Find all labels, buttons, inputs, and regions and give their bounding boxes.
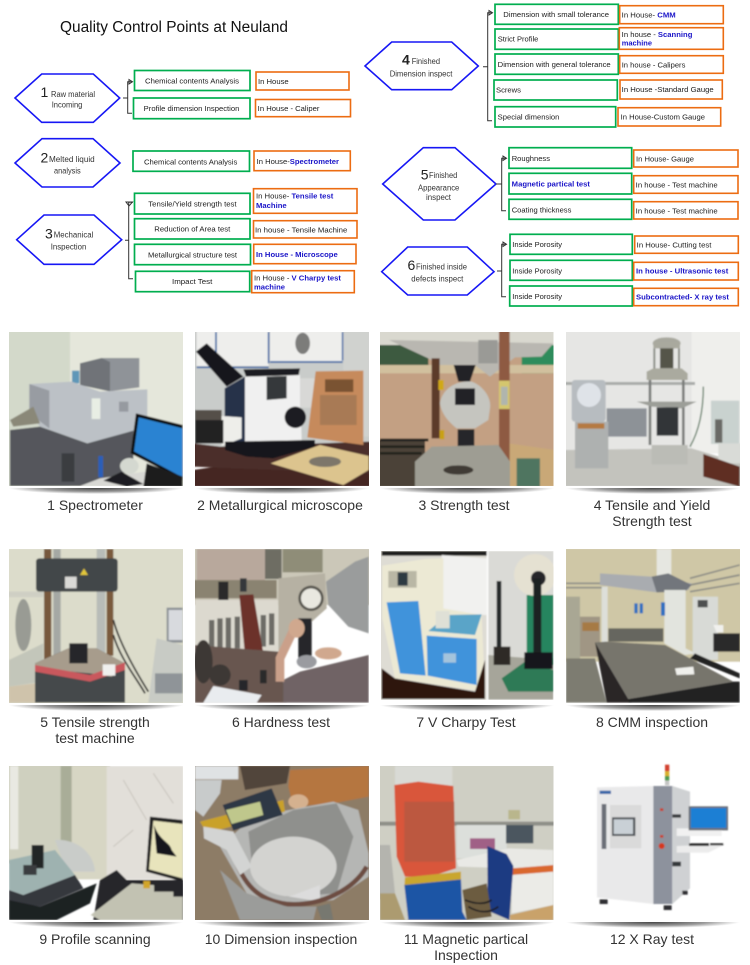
row: magnetic partical test	[509, 173, 632, 194]
row: dimension with general tolerance: Dimension with general tolerance	[498, 60, 611, 69]
row: custom gauge	[618, 108, 721, 126]
row: scanning machine	[619, 28, 723, 49]
row: profile dimension inspection: Profile dimension Inspection	[144, 104, 239, 113]
panel: 5 finished appearance inspect	[383, 148, 738, 220]
row: inside porosity: Inside Porosity	[512, 266, 562, 275]
shadow	[383, 705, 551, 711]
row: test machine	[634, 202, 738, 219]
caption: 10 Dimension inspection	[205, 931, 357, 947]
photo 3: strength test	[378, 330, 555, 487]
row: test machine: In house - Test machine	[636, 206, 718, 215]
row: chemical contents analysis: Chemical contents Analysis	[144, 158, 238, 166]
row: chemical contents analysis	[133, 151, 250, 171]
row: ultrasonic test: In house - Ultrasonic test	[636, 267, 729, 276]
row: microscope	[254, 244, 356, 264]
bracket arrow	[123, 80, 132, 113]
hexagon: mechanical	[17, 215, 122, 264]
row: cutting test: In House- Cutting test	[637, 241, 712, 250]
hexagon: mechanical: Mechanical	[54, 230, 94, 240]
photo 11: magnetic partical inspection	[378, 763, 555, 922]
row: tensile test machine: Machine	[256, 201, 287, 210]
panel: 4 finished dimension inspect	[365, 4, 723, 127]
caption	[594, 497, 710, 529]
row: custom gauge: In House-Custom Gauge	[621, 113, 705, 122]
row: calipers: In house - Calipers	[622, 61, 686, 70]
row: dimension with general tolerance	[495, 54, 618, 74]
panel: 3 mechanical inspection	[17, 189, 357, 293]
caption: Strength test	[612, 513, 692, 529]
row: standard gauge	[620, 80, 722, 99]
hexagon: raw material: 1	[40, 84, 48, 100]
row: x ray test	[634, 288, 738, 306]
row: spectrometer	[254, 151, 350, 171]
row: cutting test	[635, 236, 738, 253]
row: inside porosity: Inside Porosity	[512, 240, 562, 249]
hexagon: finished inside defects: defects inspect	[411, 274, 464, 283]
caption: 2 Metallurgical microscope	[197, 497, 363, 513]
row: strict profile	[495, 29, 618, 49]
row: tensile test machine	[254, 189, 357, 213]
shadow	[569, 488, 737, 494]
caption: 5 Tensile strength	[40, 714, 150, 730]
row: standard gauge: In House -Standard Gauge	[622, 85, 714, 94]
row: x ray test: Subcontracted- X ray test	[636, 293, 729, 302]
photo 8: cmm inspection	[565, 548, 742, 703]
photo 1: spectrometer	[7, 330, 185, 487]
caption: 4 Tensile and Yield	[594, 497, 710, 513]
row: tensile test machine: In House- Tensile test	[256, 192, 334, 201]
hexagon: finished inside defects	[382, 247, 494, 295]
hexagon: finished appearance: Appearance	[418, 183, 460, 192]
panel: 6 finished inside defects inspect	[382, 234, 738, 306]
photo 5: tensile strength test machine	[7, 548, 185, 705]
hexagon: finished dimension	[365, 42, 478, 90]
shadow	[12, 922, 180, 928]
bracket arrow	[497, 242, 506, 297]
row: calipers	[620, 56, 723, 73]
hexagon: melted liquid	[15, 139, 120, 187]
hexagon: melted liquid: 2	[40, 150, 48, 166]
row: special dimension	[495, 107, 616, 127]
row: v charpy test machine	[252, 271, 354, 293]
row: inside porosity: Inside Porosity	[512, 292, 562, 301]
caption: 12 X Ray test	[610, 931, 694, 947]
row: metallurgical structure test	[134, 244, 250, 265]
photo 9: profile scanning	[7, 763, 183, 920]
caption: 6 Hardness test	[232, 714, 330, 730]
photo 10: dimension inspection	[193, 763, 370, 923]
row: in house: In House	[258, 77, 289, 86]
shadow	[12, 705, 180, 711]
row: cmm: In House- CMM	[622, 11, 676, 20]
shadow	[383, 488, 551, 494]
row: reduction of area test	[134, 219, 250, 239]
row: chemical contents analysis: Chemical contents Analysis	[145, 76, 239, 86]
panel: 2 melted liquid analysis	[15, 139, 350, 187]
hexagon: raw material: Incoming	[52, 100, 82, 110]
row: metallurgical structure test: Metallurgical structure test	[148, 250, 238, 259]
row: in house	[256, 72, 349, 90]
row: microscope: In House - Microscope	[256, 250, 338, 259]
row: test machine: In house - Test machine	[636, 181, 718, 190]
hexagon: finished inside defects: Finished inside	[416, 262, 468, 272]
caption	[40, 714, 150, 746]
hexagon: finished appearance: Finished	[429, 171, 457, 180]
hexagon: finished dimension: Finished	[412, 57, 440, 66]
caption: Inspection	[434, 947, 498, 963]
hexagon: finished inside defects: 6	[408, 257, 416, 273]
row: gauge	[634, 150, 738, 167]
caption: 7 V Charpy Test	[416, 714, 516, 730]
hexagon: finished dimension: 4	[402, 52, 410, 68]
row: special dimension: Special dimension	[498, 112, 559, 121]
row: scanning machine: machine	[622, 38, 652, 47]
hexagon: mechanical: 3	[45, 226, 53, 242]
row: v charpy test machine: machine	[254, 282, 285, 291]
hexagon: melted liquid: analysis	[54, 166, 81, 176]
row: dimension with small tolerance: Dimension with small tolerance	[503, 10, 609, 19]
row: screws: Screws	[496, 86, 521, 95]
panel: 1 raw material incoming	[15, 70, 350, 122]
row: dimension with small tolerance	[495, 4, 618, 24]
row: gauge: In House- Gauge	[636, 154, 694, 163]
caption: 3 Strength test	[418, 497, 510, 513]
row: in house caliper: In House - Caliper	[258, 104, 320, 113]
row: spectrometer: In House-Spectrometer	[257, 157, 339, 166]
row: coating thickness	[509, 199, 632, 219]
row: impact test	[136, 271, 250, 292]
row: inside porosity	[510, 260, 632, 280]
caption	[404, 931, 528, 963]
row: test machine	[634, 176, 738, 193]
row: scanning machine: In house - Scanning	[622, 30, 693, 39]
row: cmm	[620, 6, 723, 24]
hexagon: raw material: Raw material	[51, 90, 95, 99]
caption: 9 Profile scanning	[39, 931, 151, 947]
row: magnetic partical test: Magnetic partical test	[512, 180, 590, 189]
shadow	[383, 922, 551, 928]
row: chemical contents analysis	[134, 70, 250, 90]
hexagon: mechanical: Inspection	[51, 243, 86, 252]
photo 12: x ray test	[597, 765, 728, 910]
row: in house caliper	[256, 100, 350, 117]
hexagon: finished appearance: 5	[421, 166, 429, 182]
hexagon: finished appearance	[383, 148, 496, 220]
shadow	[569, 705, 737, 711]
bracket arrow	[483, 10, 492, 121]
row: reduction of area test: Reduction of Area test	[154, 225, 231, 234]
caption: 8 CMM inspection	[596, 714, 708, 730]
row: tensile machine	[254, 221, 357, 238]
shadow	[198, 705, 366, 711]
hexagon: finished appearance: inspect	[426, 193, 452, 202]
row: tensile machine: In house - Tensile Machine	[255, 225, 347, 234]
shadow	[198, 922, 366, 928]
hexagon: raw material	[15, 74, 120, 122]
shadow	[198, 488, 366, 494]
row: coating thickness: Coating thickness	[512, 205, 572, 214]
row: ultrasonic test	[634, 262, 738, 280]
shadow	[12, 488, 180, 494]
caption: 11 Magnetic partical	[404, 931, 528, 947]
row: profile dimension inspection	[134, 98, 250, 119]
hexagon: finished dimension: Dimension inspect	[390, 69, 453, 78]
title: Quality Control Points at Neuland	[60, 19, 288, 36]
photo 6: hardness test	[193, 548, 370, 703]
shadow	[569, 922, 737, 928]
row: inside porosity	[510, 234, 632, 254]
bracket arrow	[125, 202, 133, 279]
photo 2: metallurgical microscope	[193, 330, 370, 487]
caption: 1 Spectrometer	[47, 497, 143, 513]
row: screws	[494, 80, 617, 100]
row: tensile/yield strength test: Tensile/Yield strength test	[148, 200, 238, 209]
photo 7: v charpy test	[380, 550, 556, 700]
row: inside porosity	[510, 286, 632, 306]
hexagon: melted liquid: Melted liquid	[49, 155, 95, 164]
bracket arrow	[496, 156, 506, 211]
row: impact test: Impact Test	[172, 277, 213, 286]
row: v charpy test machine: In House - V Charpy test	[254, 274, 341, 283]
row: tensile/yield strength test	[134, 193, 250, 214]
row: roughness	[509, 148, 632, 168]
photo 4: tensile and yield strength test	[565, 330, 742, 487]
row: strict profile: Strict Profile	[498, 35, 538, 44]
row: roughness: Roughness	[512, 154, 550, 163]
caption: test machine	[55, 730, 135, 746]
